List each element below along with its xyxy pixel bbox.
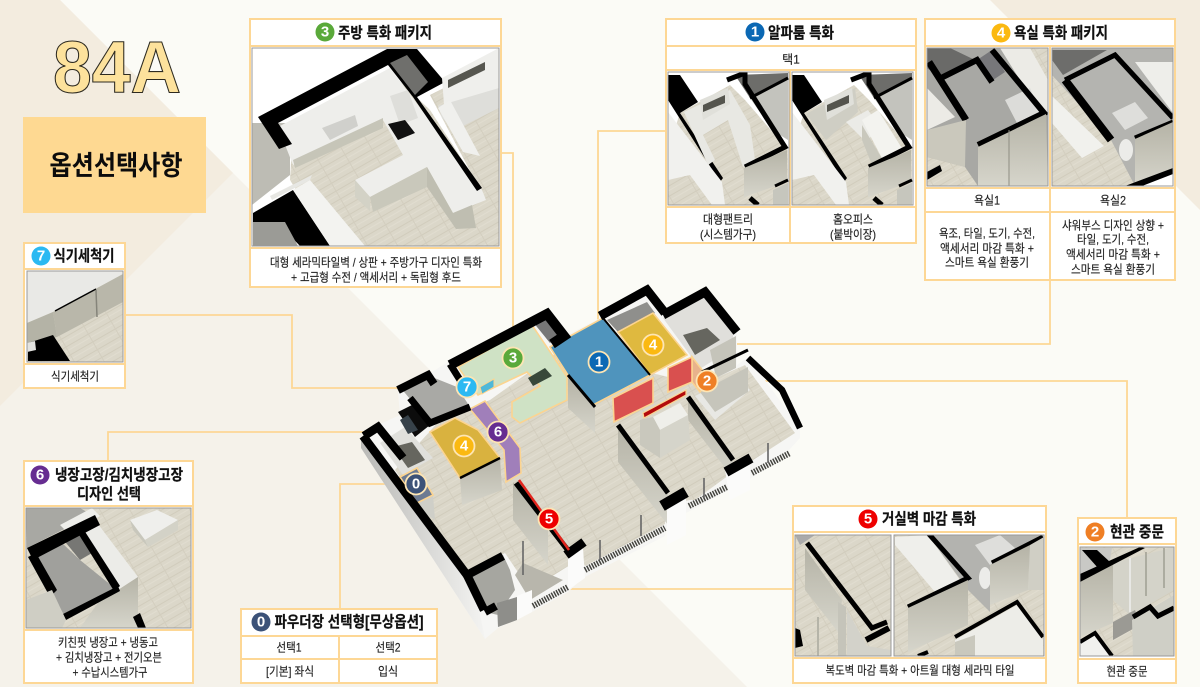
caption: 식기세척기 xyxy=(51,370,99,384)
caption xyxy=(270,256,482,284)
marker 6: 6 xyxy=(494,424,502,440)
panel heading: 냉장고장/김치냉장고장 xyxy=(55,466,183,484)
bathroom 2 render xyxy=(1052,48,1172,186)
zone 4: bath right xyxy=(618,313,687,375)
marker 1: 1 xyxy=(595,354,603,370)
marker 4 left: 4 xyxy=(460,438,469,454)
refrigerator render xyxy=(26,508,190,628)
panel: kitchen package xyxy=(250,19,501,287)
captions: (붙박이장) xyxy=(830,228,876,242)
zone 1: blue room xyxy=(550,318,650,405)
entry render xyxy=(1080,548,1174,656)
options table: 선택1 xyxy=(276,640,302,654)
dishwasher render xyxy=(28,272,122,362)
bath 2 description xyxy=(1062,218,1164,276)
kitchen render xyxy=(252,48,498,246)
panel: living room wall xyxy=(793,506,1046,683)
panel heading: 디자인 선택 xyxy=(77,485,141,503)
wood floor xyxy=(395,350,795,590)
heading box: option selection: 옵션선택사항 xyxy=(50,151,183,181)
panel heading: 파우더장 선택형[무상옵션] xyxy=(274,613,424,631)
connector lines xyxy=(108,131,1127,608)
panel icon 7: 7 xyxy=(37,248,45,264)
caption xyxy=(56,636,162,680)
bath 1 description: 욕조, 타일, 도기, 수전, xyxy=(939,226,1035,240)
red corridor stripe xyxy=(519,480,569,550)
home office render xyxy=(792,72,912,204)
bath 2 description: 샤워부스 디자인 상향 + xyxy=(1062,218,1164,232)
captions: (시스템가구) xyxy=(700,228,756,242)
panel heading: 거실벽 마감 특화 xyxy=(882,510,976,528)
zone 2: entry overlay xyxy=(692,357,710,392)
black wall tops xyxy=(363,290,800,612)
railing posts xyxy=(523,443,768,575)
bathroom 1 render xyxy=(928,48,1048,186)
bath labels: 욕실1 xyxy=(974,194,1000,208)
zone 5: accent lines xyxy=(643,390,686,418)
marker 4 right xyxy=(642,334,664,356)
panel icon 4 xyxy=(992,24,1010,42)
panel icon 5: 5 xyxy=(864,510,872,528)
bath 2 description: 스마트 욕실 환풍기 xyxy=(1071,262,1155,276)
panel: alpha room xyxy=(666,19,916,243)
marker 4 left xyxy=(454,436,474,456)
panel: powder room xyxy=(241,609,437,683)
options table: 선택2 xyxy=(376,640,401,654)
panel heading: 현관 중문 xyxy=(1110,523,1164,541)
caption: + 수납시스템가구 xyxy=(72,666,148,680)
exterior shell xyxy=(361,288,800,639)
option row: 택1 xyxy=(782,52,800,66)
zone 0: powder xyxy=(400,468,433,503)
panel heading: 알파룸 특화 xyxy=(768,24,834,42)
marker 5 xyxy=(538,508,560,530)
panel heading: 주방 특화 패키지 xyxy=(338,24,432,42)
marker 2 xyxy=(696,370,718,392)
bath 2 description: 타일, 도기, 수전, xyxy=(1077,232,1149,246)
pantry render xyxy=(668,72,788,204)
corridor wall render xyxy=(796,536,890,656)
marker 7 xyxy=(456,376,478,398)
panel icon 5 xyxy=(858,510,878,528)
panel icon 2: 2 xyxy=(1091,524,1099,540)
panel icon 1: 1 xyxy=(751,24,759,40)
markers on plan xyxy=(406,334,718,530)
panel icon 1 xyxy=(746,22,764,42)
caption: + 고급형 수전 / 액세서리 + 독립형 후드 xyxy=(291,270,461,284)
caption: 키친핏 냉장고 + 냉동고 xyxy=(58,636,158,650)
panel icon 4: 4 xyxy=(997,24,1006,42)
marker 0 xyxy=(406,474,426,494)
marker 6 xyxy=(488,422,508,442)
captions: 대형팬트리 xyxy=(703,212,753,226)
marker 4 right: 4 xyxy=(649,336,658,354)
options table: [기본] 좌식 xyxy=(266,664,314,678)
bath 2 description: 액세서리 마감 특화 + xyxy=(1066,248,1160,262)
marker 2: 2 xyxy=(703,372,711,390)
upper-left bath and utility rooms xyxy=(400,375,470,423)
bath labels xyxy=(974,194,1126,208)
bath labels: 욕실2 xyxy=(1100,194,1126,208)
zone 4: bath left xyxy=(430,418,500,478)
caption: + 김치냉장고 + 전기오븐 xyxy=(56,650,162,664)
marker 3: 3 xyxy=(509,350,517,366)
bath 1 description: 스마트 욕실 환풍기 xyxy=(945,256,1029,270)
caption: 복도벽 마감 특화 + 아트월 대형 세라믹 타일 xyxy=(826,664,1014,678)
heading box: option selection xyxy=(23,117,206,213)
panel heading: 식기세척기 xyxy=(54,247,114,265)
panel: bathroom package xyxy=(925,19,1175,280)
panel icon 3: 3 xyxy=(321,24,329,40)
marker 7: 7 xyxy=(463,378,471,396)
zone 5: wall panels xyxy=(613,357,692,422)
marker 3 xyxy=(502,348,524,368)
panel icon 2 xyxy=(1086,522,1104,542)
caption: 대형 세라믹타일벽 / 상판 + 주방가구 디자인 특화 xyxy=(270,256,482,270)
panel: dishwasher xyxy=(24,243,125,388)
panel icon 7 xyxy=(32,246,50,266)
railings xyxy=(533,453,790,606)
floor plan xyxy=(361,288,800,639)
art wall render xyxy=(894,536,1044,656)
marker 5: 5 xyxy=(545,510,553,528)
panel icon 0: 0 xyxy=(257,614,265,630)
panel icon 6: 6 xyxy=(36,466,44,484)
zone 3: kitchen xyxy=(458,325,567,423)
bath 1 description: 액세서리 마감 특화 + xyxy=(940,242,1034,256)
panel icon 6 xyxy=(30,466,50,484)
bath 1 description xyxy=(939,226,1035,270)
wall faces xyxy=(513,482,548,565)
options table xyxy=(266,640,401,678)
marker 0: 0 xyxy=(412,476,420,492)
panel: refrigerator design xyxy=(24,461,193,683)
caption: 현관 중문 xyxy=(1106,664,1148,678)
options table: 입식 xyxy=(378,664,398,678)
marker 1 xyxy=(588,352,610,372)
panel icon 3 xyxy=(316,22,334,42)
title: 84A: 84A xyxy=(53,28,181,108)
captions: 홈오피스 xyxy=(833,212,873,226)
panel heading: 욕실 특화 패키지 xyxy=(1014,24,1108,42)
panel icon 0 xyxy=(252,612,270,632)
zone 6: refrigerator xyxy=(470,401,521,482)
panel: entry door xyxy=(1078,518,1176,683)
zone 7: dishwasher xyxy=(480,379,494,394)
captions xyxy=(700,212,876,242)
panel heading xyxy=(55,466,183,503)
